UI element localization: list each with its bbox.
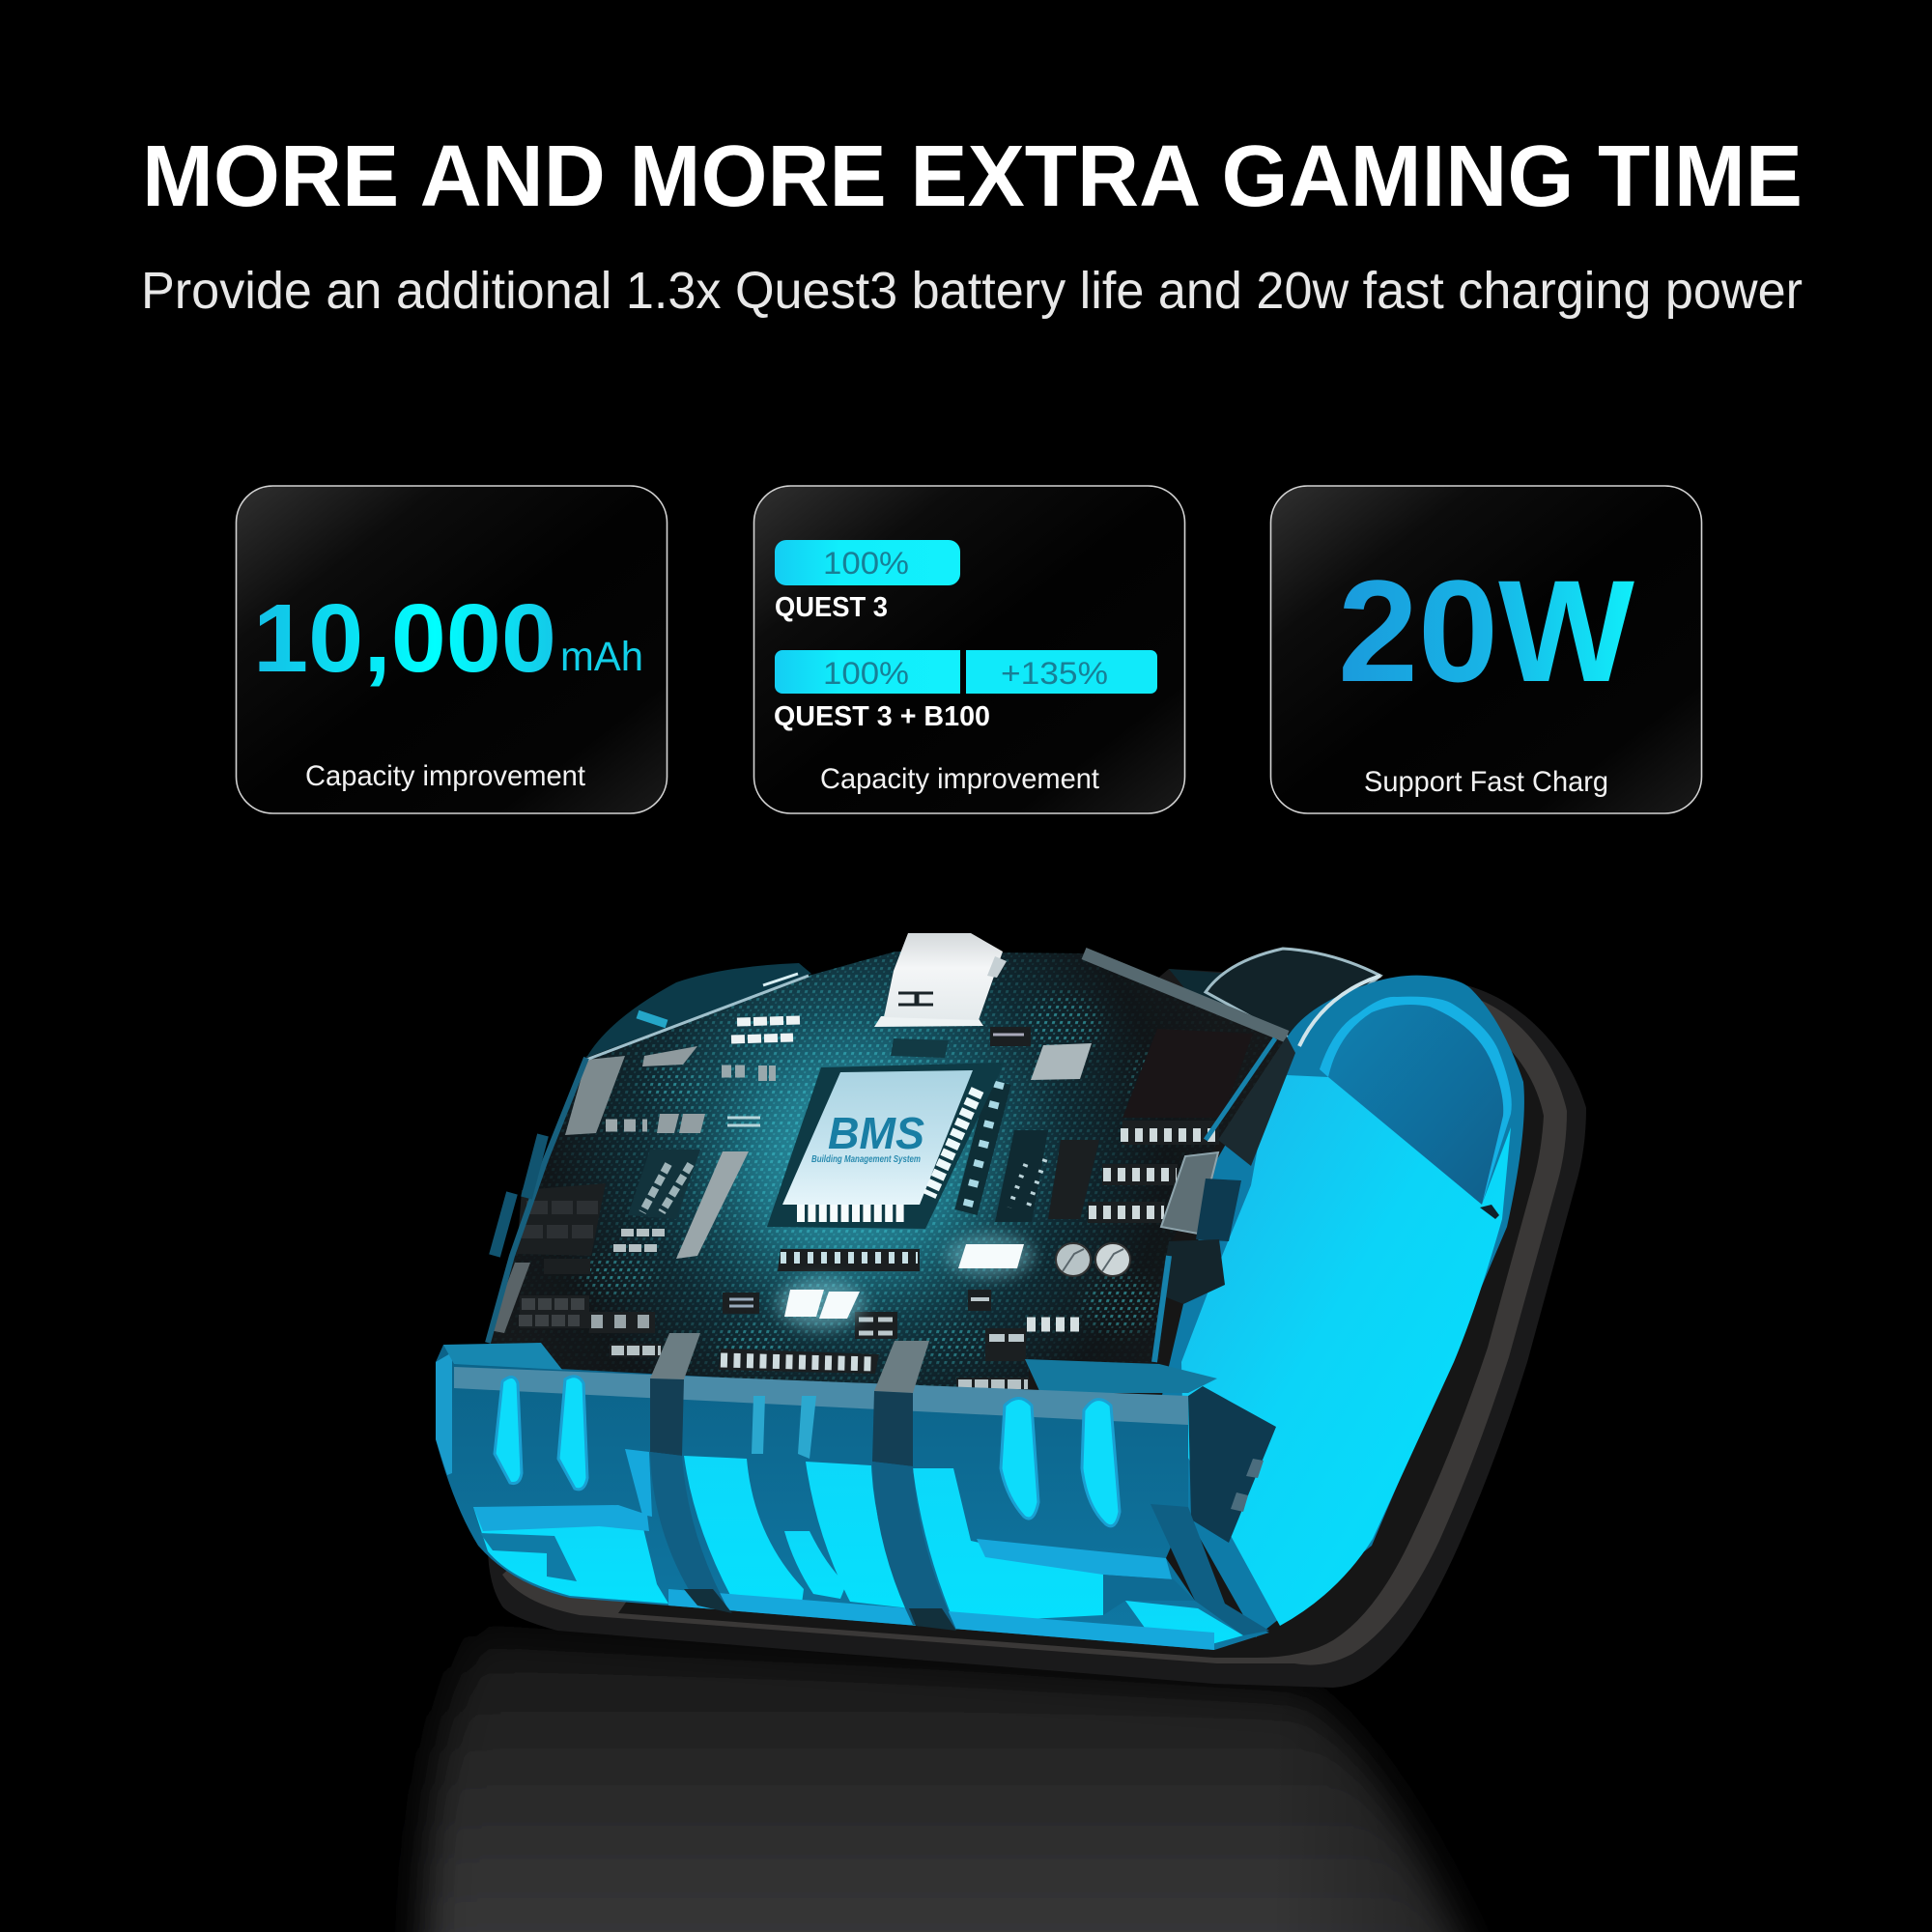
label: quest 3: QUEST 3 — [775, 592, 888, 623]
label: quest 3 + b100: QUEST 3 + B100 — [774, 701, 990, 732]
capacity caption: Capacity improvement — [305, 760, 586, 792]
pin rows — [519, 1020, 1219, 1384]
capacity value: 10,000 — [253, 584, 556, 693]
large black chip — [1122, 1029, 1253, 1118]
panel: fast charging — [1271, 486, 1702, 813]
bms sublabel: Building Management System — [811, 1154, 921, 1165]
title: MORE AND MORE EXTRA GAMING TIME — [142, 128, 1803, 225]
bar: quest 3: 100% — [823, 546, 909, 581]
bms chip — [767, 1063, 1005, 1232]
bar: quest 3 plus b100: +135% — [1001, 656, 1108, 691]
bar: quest 3 plus b100 — [775, 650, 1157, 694]
device shell — [488, 969, 1586, 1688]
floor reflection — [425, 1637, 1526, 1932]
slots — [495, 1377, 1120, 1526]
power value: 20W — [1338, 550, 1634, 712]
bms label: BMS — [828, 1108, 924, 1158]
glass case edges — [488, 953, 1380, 1362]
usb-c connector — [874, 933, 1007, 1027]
panel: capacity — [236, 486, 667, 813]
bar: quest 3 plus b100: 100% — [823, 656, 909, 691]
subtitle: Provide an additional 1.3x Quest3 battery life and 20w fast charging power — [141, 262, 1803, 320]
bar: quest 3 — [775, 540, 960, 585]
battery cell — [1150, 976, 1524, 1637]
power caption: Support Fast Charg — [1364, 766, 1608, 798]
capacitors — [1056, 1243, 1130, 1276]
front battery and clear case — [436, 1333, 1276, 1650]
white led pads — [778, 1235, 1034, 1329]
medium blue steps — [473, 1449, 1214, 1650]
side latch — [1151, 1386, 1276, 1635]
glass cylinder — [1206, 949, 1380, 1043]
capacity value: mAh — [560, 634, 643, 680]
grey components — [490, 1043, 1092, 1333]
bright cells — [473, 1456, 1243, 1648]
comparison caption: Capacity improvement — [820, 763, 1100, 795]
illustration: power bank cutaway — [436, 933, 1586, 1688]
straps — [650, 1333, 956, 1631]
dark chip clusters — [517, 1027, 1219, 1391]
circuit board — [488, 933, 1287, 1394]
panel: battery comparison — [753, 486, 1184, 813]
